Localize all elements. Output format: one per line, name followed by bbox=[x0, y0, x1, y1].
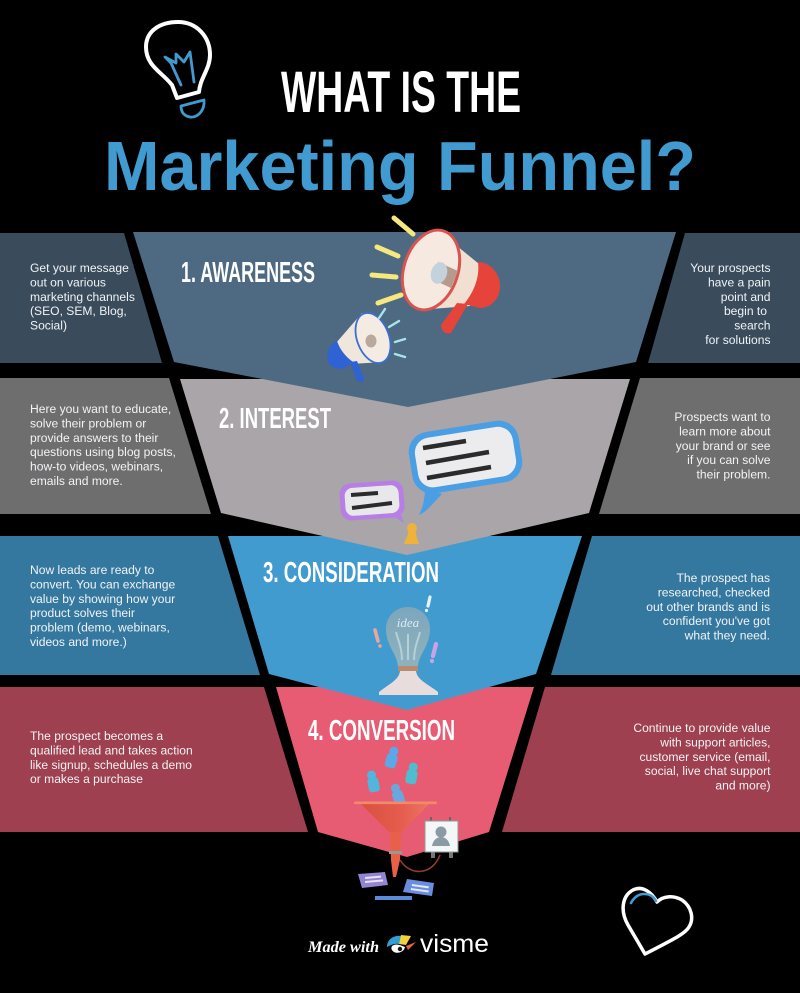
icon: yellow pawn bbox=[404, 523, 419, 544]
icon: blue speech bubble bbox=[406, 418, 525, 515]
left text: Now leads are ready to bbox=[30, 563, 155, 577]
icon: funnel with people and leads bbox=[354, 745, 458, 900]
left text: Social) bbox=[30, 319, 67, 333]
visme wordmark: visme bbox=[420, 930, 489, 958]
right text: customer service (email, bbox=[639, 750, 770, 764]
left text: questions using blog posts, bbox=[30, 445, 176, 459]
left text: or makes a purchase bbox=[30, 772, 143, 786]
left text: how-to videos, webinars, bbox=[30, 460, 163, 474]
heading: 2. INTEREST bbox=[219, 403, 331, 435]
left text: qualified lead and takes action bbox=[30, 743, 193, 757]
right text: your brand or see bbox=[676, 439, 771, 453]
right text: have a pain bbox=[708, 275, 770, 289]
right text: what they need. bbox=[684, 629, 770, 643]
right side panel bbox=[551, 536, 800, 675]
right text: learn more about bbox=[679, 424, 771, 438]
right text: if you can solve bbox=[687, 453, 771, 467]
left side panel bbox=[0, 536, 260, 675]
left text: value by showing how your bbox=[30, 592, 175, 606]
right side panel bbox=[599, 378, 800, 514]
panel: stage 4 conversion bbox=[0, 687, 800, 900]
title line one: WHAT IS THE bbox=[281, 60, 521, 125]
left side panel bbox=[0, 233, 162, 363]
made with text: Made with bbox=[307, 939, 379, 956]
icon: light bulb doodle bbox=[146, 22, 210, 117]
right text: confident you've got bbox=[663, 614, 771, 628]
left text: product solves their bbox=[30, 606, 135, 620]
left text: (SEO, SEM, Blog, bbox=[30, 304, 127, 318]
right text: begin to bbox=[724, 304, 767, 318]
left text: solve their problem or bbox=[30, 416, 146, 430]
right text: search bbox=[734, 319, 770, 333]
heading: 4. CONVERSION bbox=[308, 715, 455, 747]
right text: with support articles, bbox=[659, 735, 770, 749]
funnel segment bbox=[180, 379, 630, 555]
left text: Here you want to educate, bbox=[30, 402, 171, 416]
icon: idea light bulb bbox=[375, 597, 438, 695]
left text: problem (demo, webinars, bbox=[30, 621, 170, 635]
funnel segment bbox=[228, 536, 582, 710]
right side panel bbox=[648, 233, 800, 363]
icon: yellow rays bbox=[372, 218, 413, 303]
panel: stage 3 consideration bbox=[0, 536, 800, 710]
panel: stage 1 awareness bbox=[0, 218, 800, 407]
funnel segment bbox=[276, 687, 534, 857]
right text: Continue to provide value bbox=[633, 721, 771, 735]
heading: 3. CONSIDERATION bbox=[263, 557, 439, 589]
left text: marketing channels bbox=[30, 290, 135, 304]
title bbox=[104, 60, 696, 205]
right text: researched, checked bbox=[658, 585, 770, 599]
left text: provide answers to their bbox=[30, 431, 158, 445]
icon: light blue rays bbox=[379, 309, 405, 357]
heading: 1. AWARENESS bbox=[181, 257, 315, 289]
right text: social, live chat support bbox=[645, 764, 771, 778]
icon: blue megaphone bbox=[327, 308, 397, 382]
right text: for solutions bbox=[705, 333, 770, 347]
right text: The prospect has bbox=[677, 571, 770, 585]
left text: convert. You can exchange bbox=[30, 577, 176, 591]
title line two: Marketing Funnel? bbox=[104, 127, 696, 205]
icon: heart doodle bbox=[623, 888, 692, 954]
right text: their problem. bbox=[697, 468, 770, 482]
panel: stage 2 interest bbox=[0, 378, 800, 555]
left text: out on various bbox=[30, 275, 106, 289]
icon: red megaphone bbox=[393, 223, 500, 334]
credit: made with visme bbox=[307, 930, 489, 958]
left side panel bbox=[0, 378, 211, 514]
left text: like signup, schedules a demo bbox=[30, 758, 192, 772]
left text: Get your message bbox=[30, 261, 129, 275]
right text: point and bbox=[721, 290, 770, 304]
right text: and more) bbox=[715, 779, 770, 793]
icon: purple speech bubble bbox=[339, 480, 405, 523]
right text: Your prospects bbox=[690, 261, 770, 275]
left text: videos and more.) bbox=[30, 635, 127, 649]
left text: emails and more. bbox=[30, 474, 123, 488]
right text: out other brands and is bbox=[646, 600, 770, 614]
funnel segment bbox=[133, 232, 676, 407]
right side panel bbox=[502, 687, 800, 832]
visme logo mark bbox=[387, 935, 416, 953]
right text: Prospects want to bbox=[674, 410, 771, 424]
left text: The prospect becomes a bbox=[30, 729, 163, 743]
left side panel bbox=[0, 687, 308, 832]
icon: idea light bulb: idea bbox=[397, 615, 420, 630]
